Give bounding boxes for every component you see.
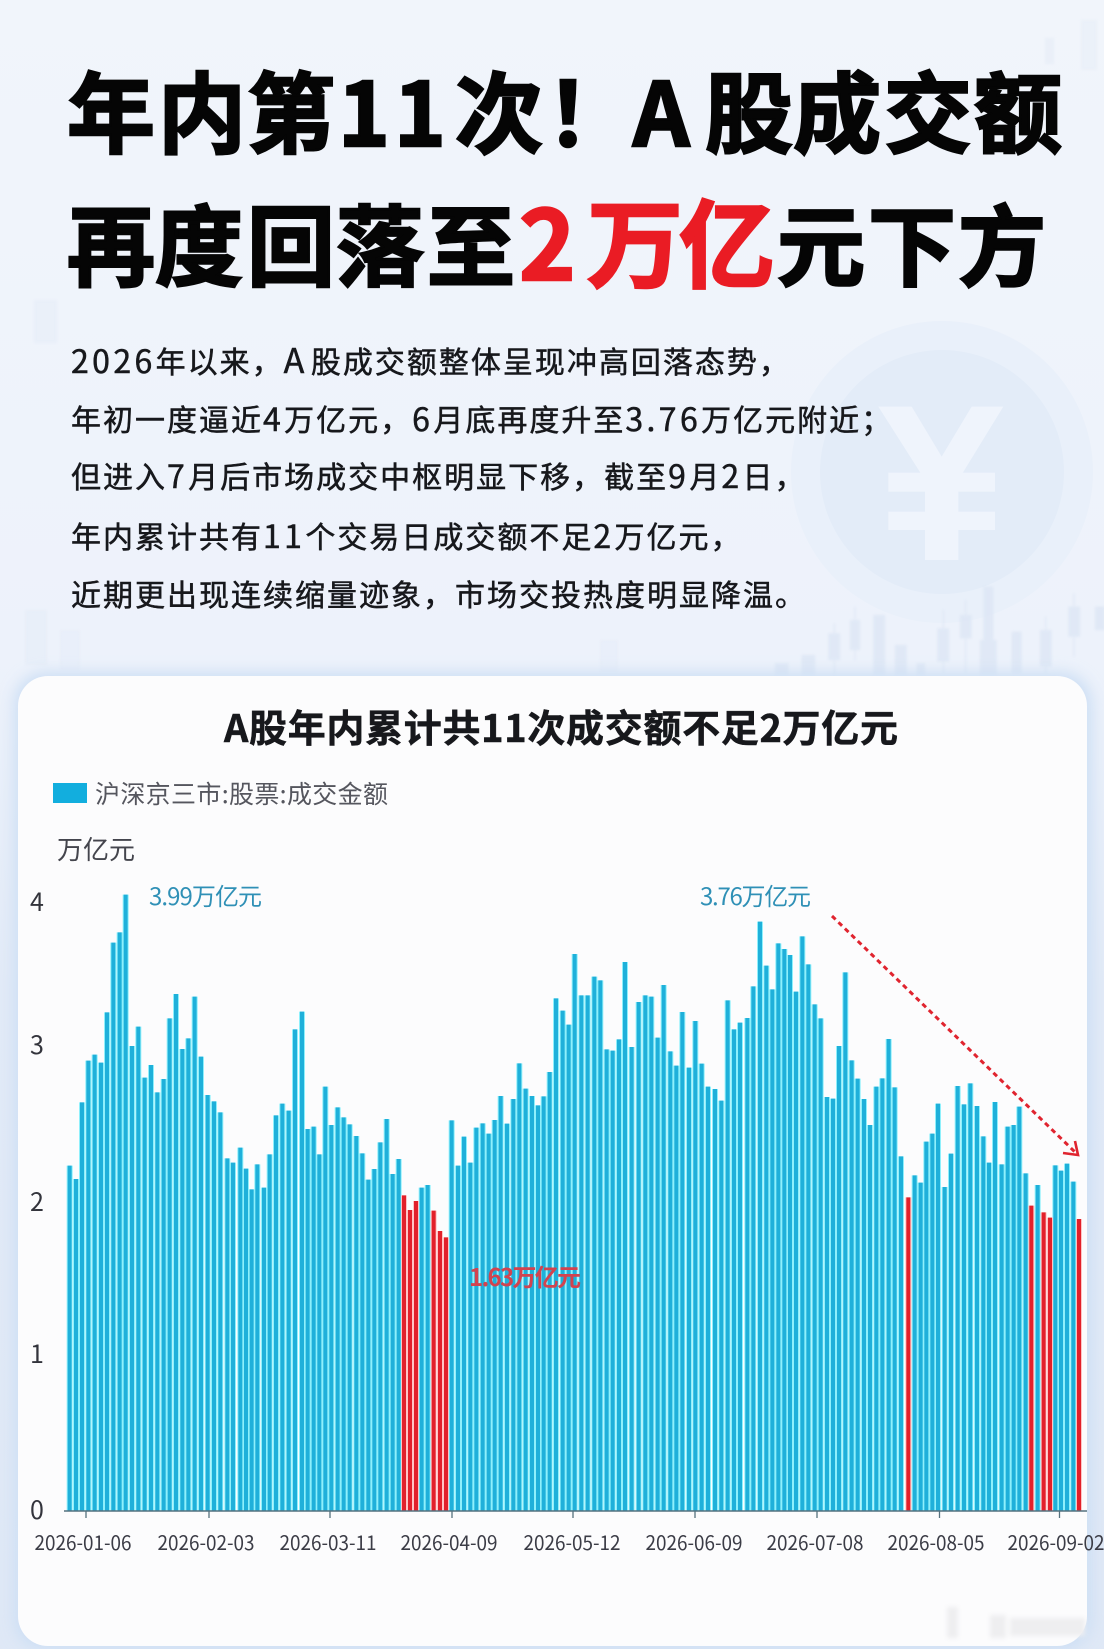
y axis labels: 4 [30,883,44,919]
title: 2万亿 [519,169,775,308]
bar chart: daily turnover [70,895,1079,1511]
x axis date labels: 2026-02-03 [158,1527,254,1556]
x axis date labels [34,1527,1104,1556]
icon: yen coin watermark [791,321,1093,623]
callout: peak 3.99: 3.99万亿元 [149,877,262,912]
text block: intro paragraph [71,334,893,615]
y axis labels: 2 [30,1183,44,1219]
text block: intro paragraph: 但进入7月后市场成交中枢明显下移，截至9月2日， [71,452,807,498]
title: 年内第11次！A股成交额 [67,45,1062,172]
x axis with ticks [64,1511,1087,1518]
x axis date labels: 2026-03-11 [280,1527,376,1556]
text block: intro paragraph: 近期更出现连续缩量迹象，市场交投热度明显降温。 [71,571,807,615]
legend: 沪深京三市:股票:成交金额 [95,775,388,811]
panel: chart card [14,672,1104,1649]
y axis labels [30,883,44,1527]
title: 元下方 [777,178,1046,305]
chart heading: A股年内累计共11次成交额不足2万亿元 [223,698,898,753]
callout: low 1.63: 1.63万亿元 [469,1258,581,1293]
y axis unit: 万亿元 [57,830,135,867]
text block: intro paragraph: 年内累计共有11个交易日成交额不足2万亿元， [71,512,742,558]
x axis date labels: 2026-07-08 [766,1527,864,1556]
y axis labels: 1 [30,1335,44,1371]
x axis date labels: 2026-05-12 [524,1527,620,1556]
callout: peak 3.76: 3.76万亿元 [700,877,811,912]
x axis date labels: 2026-06-09 [646,1527,742,1556]
title [67,45,1062,308]
x axis date labels: 2026-01-06 [34,1527,132,1556]
title: 再度回落至 [67,178,515,305]
x axis date labels: 2026-04-09 [400,1527,498,1556]
background: faint candlesticks [25,20,1104,675]
text block: intro paragraph: 2026年以来，A股成交额整体呈现冲高回落态势， [71,334,791,383]
y axis labels: 0 [30,1491,44,1527]
x axis date labels: 2026-08-05 [888,1527,984,1556]
watermark smudge [947,1607,1085,1638]
y axis labels: 3 [30,1026,44,1062]
arrow: downtrend [832,916,1078,1155]
text block: intro paragraph: 年初一度逼近4万亿元，6月底再度升至3.76万亿元附近； [71,395,893,441]
